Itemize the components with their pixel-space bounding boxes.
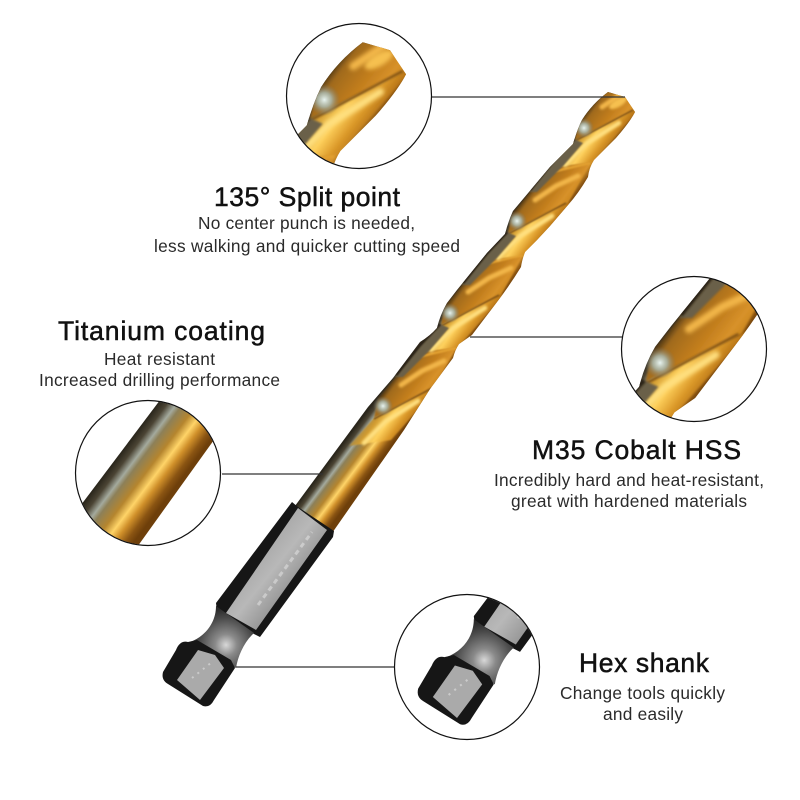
text block: hex shank: Hex shank bbox=[579, 648, 710, 678]
text block: M35 cobalt HSS: Incredibly hard and heat-resistant, bbox=[494, 470, 764, 490]
callout circle: hex shank bbox=[394, 594, 540, 740]
leader line: titanium coating bbox=[222, 473, 323, 475]
text block: titanium coating: Titanium coating bbox=[58, 316, 265, 346]
text block: hex shank: Change tools quickly bbox=[560, 683, 725, 703]
text block: titanium coating: Increased drilling performance bbox=[39, 370, 280, 390]
callout circle: coated shaft bbox=[74, 400, 222, 546]
text block: titanium coating bbox=[39, 316, 280, 390]
leader line: hex shank bbox=[236, 666, 394, 668]
text block: split point: No center punch is needed, bbox=[198, 213, 415, 233]
text block: M35 cobalt HSS: great with hardened materials bbox=[511, 491, 747, 511]
text block: hex shank bbox=[560, 648, 725, 724]
text block: M35 cobalt HSS: M35 Cobalt HSS bbox=[532, 435, 741, 465]
leader line: split point bbox=[432, 96, 625, 98]
callout circle: flutes bbox=[620, 276, 768, 422]
text block: split point: less walking and quicker cutting speed bbox=[154, 236, 460, 256]
callout circle: drill tip bbox=[286, 22, 432, 170]
text block: split point: 135° Split point bbox=[214, 182, 401, 212]
drill bit: hex shank bbox=[163, 502, 334, 706]
text block: M35 cobalt HSS bbox=[494, 435, 764, 511]
text block: split point bbox=[154, 182, 460, 256]
drill bit: titanium coated body bbox=[292, 67, 659, 536]
text block: hex shank: and easily bbox=[603, 704, 683, 724]
text block: titanium coating: Heat resistant bbox=[104, 349, 215, 369]
leader line: cobalt HSS bbox=[470, 336, 622, 338]
